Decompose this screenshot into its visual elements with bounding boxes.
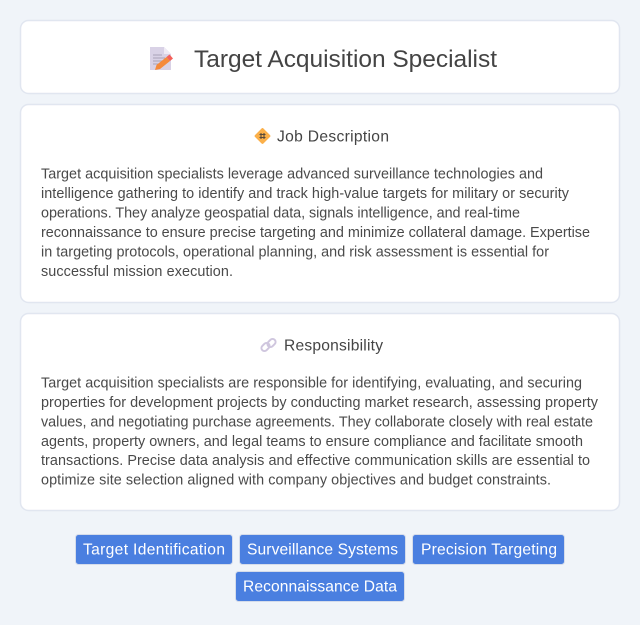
text block: job description: operations. They analyze geospatial data, signals intelligence, and real-time: [41, 206, 520, 222]
text block: responsibility: agents, property owners, and legal teams to ensure compliance and facilitate smooth: [41, 434, 583, 450]
text block: responsibility: optimize site selection aligned with company objectives and budget constraints.: [41, 472, 551, 488]
panel: title card: [20, 20, 620, 94]
text block: job description: reconnaissance to ensure precise targeting and minimize collateral damage. Expertise: [41, 225, 590, 241]
icon: document with pencil: [150, 47, 173, 70]
heading: responsibility: Responsibility: [284, 338, 383, 354]
tag: reconnaissance data: Reconnaissance Data: [243, 578, 397, 596]
icon: diamond sign: [254, 128, 271, 144]
text block: responsibility: properties for development projects by conducting market research, assessing property: [41, 395, 599, 411]
tag: precision targeting: [412, 534, 564, 564]
text block: job description: [41, 166, 590, 280]
tag: target identification: [76, 534, 232, 564]
tags: [76, 534, 564, 602]
tag: surveillance systems: Surveillance Systems: [247, 542, 398, 558]
panel: responsibility: [20, 314, 620, 510]
text block: responsibility: Target acquisition specialists are responsible for identifying, evaluating, and securing: [41, 376, 582, 392]
text block: job description: intelligence gathering to identify and track high-value targets for military or security: [41, 186, 570, 202]
tag: target identification: Target Identification: [83, 542, 225, 558]
text block: job description: Target acquisition specialists leverage advanced surveillance technologies and: [41, 166, 543, 182]
title: Target Acquisition Specialist: [194, 46, 497, 73]
icon: chain link: [260, 338, 277, 352]
heading: job description: Job Description: [277, 128, 389, 146]
panel: job description: [20, 104, 620, 302]
tag: precision targeting: Precision Targeting: [421, 542, 557, 558]
text block: responsibility: values, and negotiating purchase agreements. They collaborate closely with real estate: [41, 414, 593, 430]
text block: responsibility: transactions. Precise data analysis and effective communication skills are essential to: [41, 453, 590, 469]
text block: responsibility: [41, 376, 599, 488]
tag: surveillance systems: [240, 534, 406, 564]
text block: job description: in targeting protocols, operational planning, and risk assessment is essential for: [41, 244, 549, 260]
text block: job description: successful mission execution.: [41, 264, 233, 280]
tag: reconnaissance data: [236, 572, 404, 602]
